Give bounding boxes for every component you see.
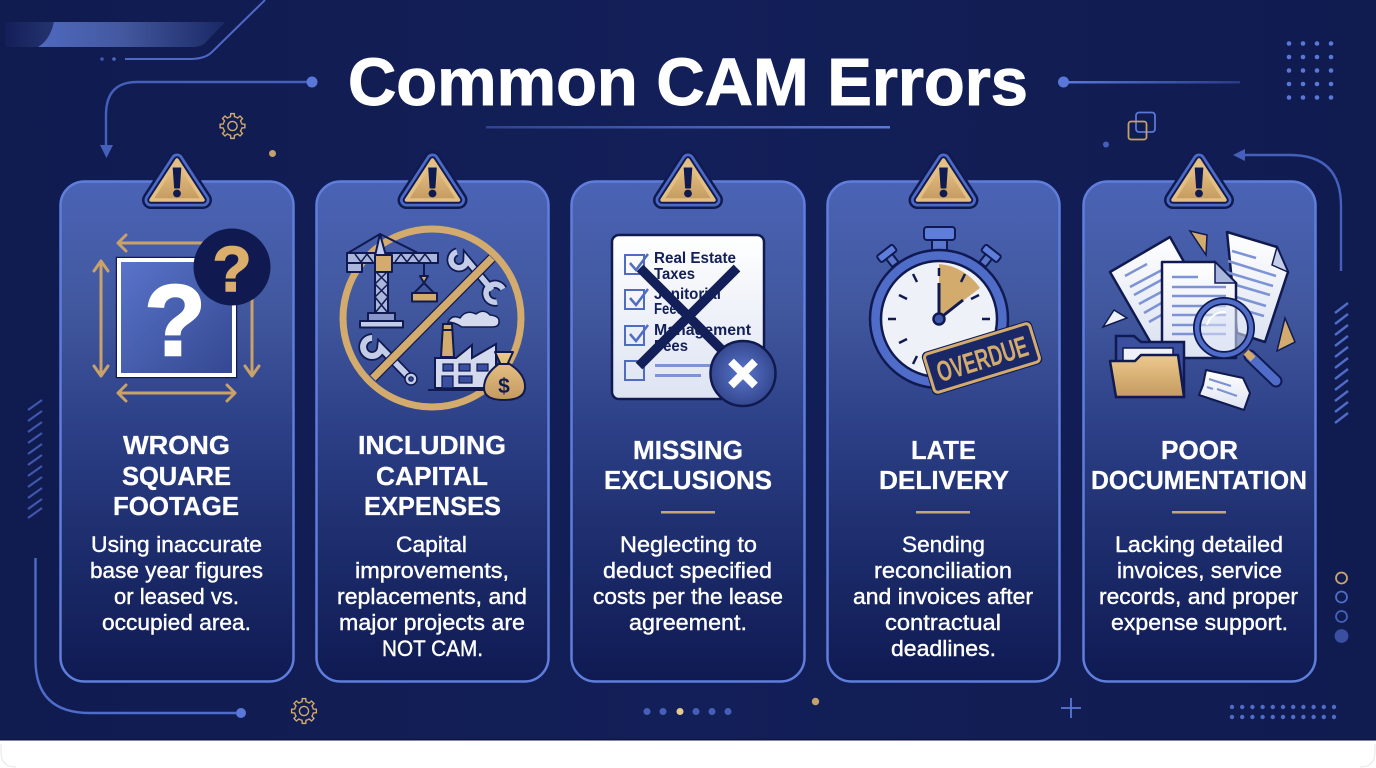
factory [435,344,496,388]
description: invoices, service [1117,558,1282,583]
description: costs per the lease [593,584,783,609]
heading [358,430,506,521]
decoration: right hatching [1335,303,1348,423]
icon: square with question marks [94,228,270,401]
description: occupied area. [102,610,251,635]
description [853,532,1033,661]
heading [1091,435,1307,495]
icon: crossed out checklist: Fees [654,301,684,318]
icon: crossed out checklist: Real Estate [654,250,736,267]
icon: plus [1061,698,1081,718]
money bag [484,352,525,400]
pagination dots [644,708,732,715]
heading: SQUARE [122,461,231,491]
heading: EXCLUSIONS [604,465,772,495]
title: Common CAM Errors [348,45,1028,120]
description: Sending [902,532,985,557]
heading: DELIVERY [879,465,1009,495]
icon: crossed out checklist [612,235,776,406]
heading: WRONG [123,430,230,460]
heading [113,430,239,521]
decoration: gold dot bottom [812,698,819,705]
icon: crossed out checklist: Management [654,322,751,339]
decoration: dot grid bottom [1230,705,1336,719]
icon: prohibited construction: $ [498,375,510,398]
icon: stopwatch overdue [870,227,1043,396]
description: and invoices after [853,584,1033,609]
panel: including capital expenses [316,160,548,682]
icon: gear top [220,114,245,138]
heading: LATE [911,435,976,465]
description: Lacking detailed [1115,532,1283,557]
decoration: top-left bar and circuit line [5,0,265,61]
description: replacements, and [337,584,527,609]
arrow: bottom left connector [36,558,246,718]
heading: POOR [1161,435,1238,465]
right title connector [1058,76,1240,88]
heading: INCLUDING [358,430,506,460]
arrow: top right connector [1233,149,1341,271]
description: deduct specified [603,558,772,583]
divider [916,511,970,514]
icon: crossed out checklist: Janitorial [654,286,721,303]
icon: square with question marks: ? [212,233,252,305]
description: expense support. [1111,610,1288,635]
decoration: right rings [1336,572,1348,642]
divider [661,511,715,514]
icon: prohibited construction [343,229,525,407]
heading: FOOTAGE [113,491,239,521]
icon: overlapping squares [1128,112,1155,140]
heading [879,435,1009,495]
decoration: left hatching [28,400,42,518]
icon: warning triangle [662,160,714,200]
wrenches [363,252,503,385]
heading: EXPENSES [364,491,501,521]
description: reconciliation [874,558,1012,583]
description: base year figures [90,558,263,583]
description [90,532,263,635]
description: Capital [396,532,467,557]
panel: late delivery [828,160,1060,682]
heading: CAPITAL [376,461,488,491]
description: contractual [885,610,1001,635]
description: agreement. [629,610,747,635]
divider [1172,511,1226,514]
arrow: left title connector [100,76,318,158]
panel: poor documentation [1084,160,1316,682]
folder [1116,336,1184,397]
heading: MISSING [633,435,743,465]
torn note [1199,370,1250,410]
magnifier [1250,356,1276,381]
icon: gear bottom [292,699,316,723]
description: major projects are [339,610,525,635]
description: records, and proper [1099,584,1298,609]
panel: missing exclusions [572,160,804,682]
decoration: dot grid top right [1287,41,1333,100]
icon: warning triangle [1173,160,1225,200]
icon: stopwatch overdue: OVERDUE [933,331,1032,389]
description: or leased vs. [114,584,239,609]
description: NOT CAM. [382,636,483,661]
icon: crossed out checklist: Fees [654,338,688,355]
icon: warning triangle [406,160,458,200]
decoration: blue dot [1103,142,1109,148]
icon: square with question marks: ? [144,265,206,377]
heading [604,435,772,495]
ban diagonal [373,258,492,378]
description [593,532,783,635]
title underline [486,126,890,128]
description: deadlines. [891,636,996,661]
icon: crossed out checklist: Taxes [654,266,695,283]
icon: warning triangle [151,160,203,200]
description: Neglecting to [620,532,757,557]
panel: wrong square footage [60,160,294,682]
description [1099,532,1298,635]
description: Using inaccurate [91,532,262,557]
icon: scattered documents [1103,231,1295,410]
heading: DOCUMENTATION [1091,465,1307,495]
icon: warning triangle [918,160,970,200]
decoration: gold dot [269,150,276,157]
cloud [448,311,499,327]
description [337,532,527,661]
description: improvements, [355,558,509,583]
